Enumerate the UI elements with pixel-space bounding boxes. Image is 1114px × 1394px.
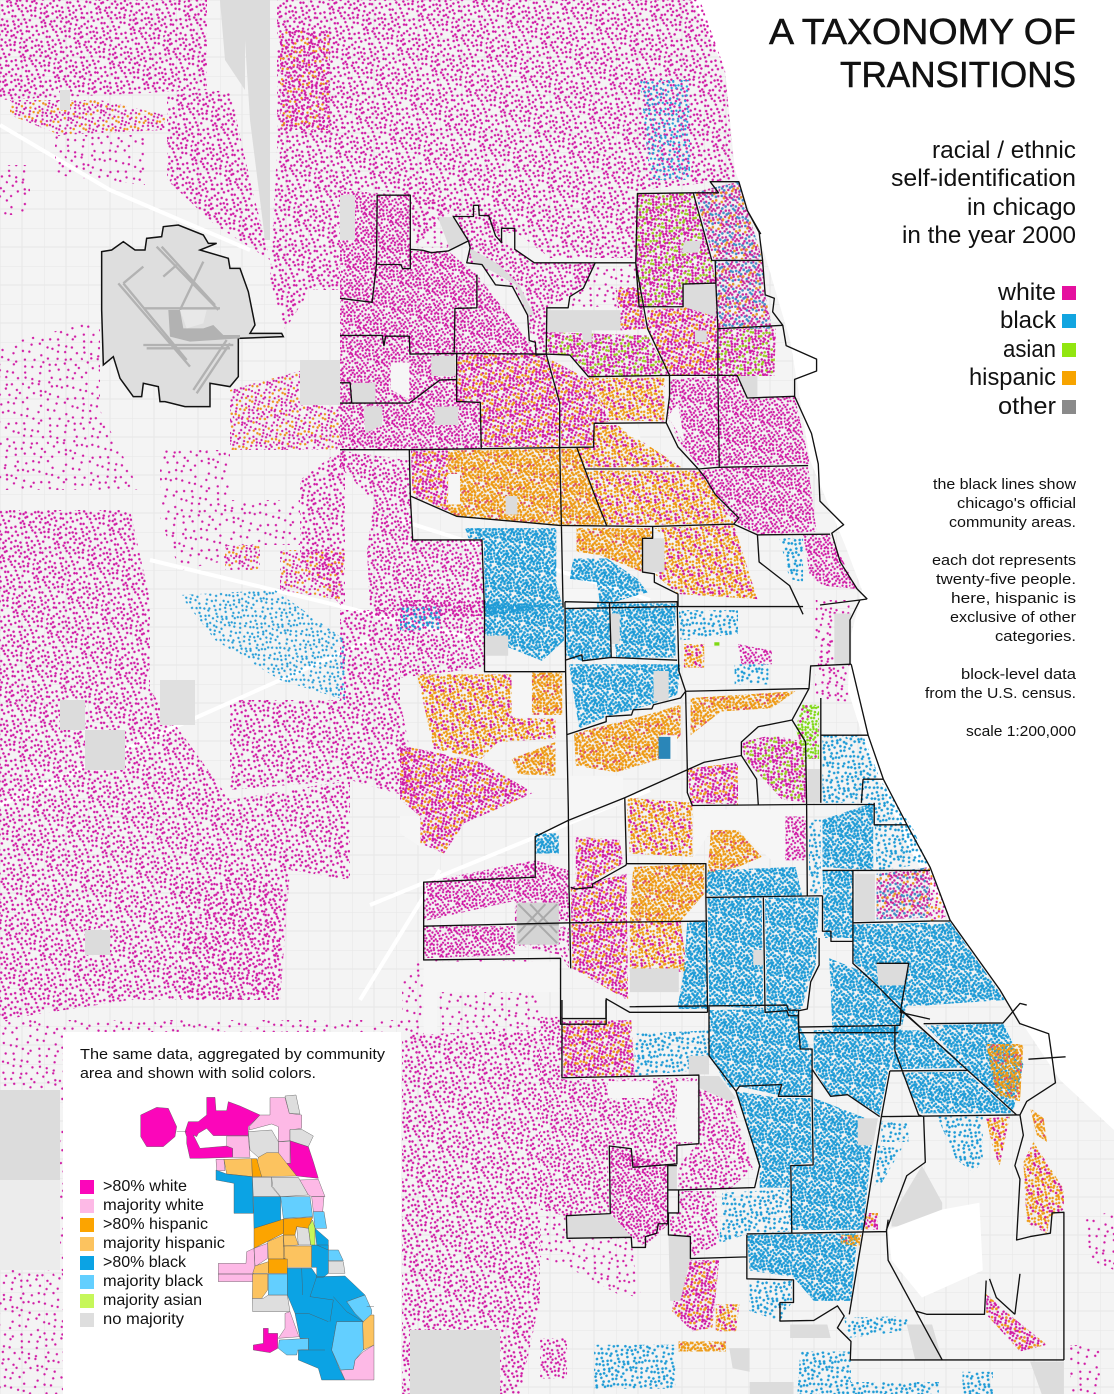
explanatory notes: categories. bbox=[995, 628, 1076, 645]
explanatory notes: from the U.S. census. bbox=[925, 685, 1076, 702]
inset legend: majority asian bbox=[103, 1292, 202, 1309]
black community area boundaries: far south bbox=[562, 1000, 1066, 1360]
inset legend: majority white bbox=[103, 1197, 204, 1214]
icon: o'hare airport bbox=[102, 225, 283, 407]
explanatory notes: block-level data bbox=[961, 666, 1077, 683]
dot colour legend: other bbox=[998, 393, 1056, 420]
dot colour legend: white bbox=[997, 279, 1056, 306]
inset legend: >80% white bbox=[103, 1178, 187, 1195]
dots: west and south side community areas bbox=[400, 600, 930, 1033]
inset legend: majority hispanic bbox=[103, 1235, 225, 1252]
inset legend: >80% hispanic bbox=[103, 1216, 208, 1233]
inset caption bbox=[80, 1046, 386, 1082]
title: TRANSITIONS bbox=[840, 54, 1076, 95]
dot colour legend bbox=[969, 279, 1076, 420]
subtitle: in the year 2000 bbox=[902, 222, 1076, 249]
subtitle: self-identification bbox=[891, 165, 1076, 192]
black community area boundaries: west and south bbox=[424, 600, 930, 1036]
parks: far south bbox=[566, 1056, 1064, 1394]
dot colour legend: hispanic bbox=[969, 364, 1056, 391]
parks and open land bbox=[0, 0, 500, 1394]
black community area boundaries: north bbox=[340, 182, 867, 616]
subtitle: racial / ethnic bbox=[932, 137, 1076, 164]
subtitle: in chicago bbox=[967, 194, 1076, 221]
explanatory notes: the black lines show bbox=[933, 476, 1076, 493]
dot colour legend: asian bbox=[1003, 336, 1056, 363]
title: A TAXONOMY OF bbox=[769, 11, 1076, 52]
dot colour legend: black bbox=[1000, 307, 1057, 334]
explanatory notes bbox=[925, 476, 1077, 740]
inset choropleth map bbox=[141, 1095, 374, 1380]
explanatory notes: exclusive of other bbox=[950, 609, 1076, 626]
explanatory notes: chicago's official bbox=[957, 495, 1076, 512]
inset caption: The same data, aggregated by community bbox=[80, 1046, 386, 1063]
explanatory notes: community areas. bbox=[949, 514, 1076, 531]
dots: far south community areas bbox=[540, 1008, 1064, 1394]
black boundaries: connecting segments bbox=[820, 599, 1020, 1024]
inset legend: majority black bbox=[103, 1273, 204, 1290]
inset legend bbox=[80, 1178, 225, 1328]
subtitle bbox=[891, 137, 1076, 249]
parks: north side bbox=[352, 217, 757, 608]
inset caption: area and shown with solid colors. bbox=[80, 1065, 316, 1082]
icon: midway airport bbox=[517, 903, 559, 945]
panel: aggregated inset bbox=[63, 1032, 401, 1394]
title bbox=[769, 11, 1076, 95]
explanatory notes: each dot represents bbox=[932, 552, 1076, 569]
inset legend: no majority bbox=[103, 1311, 184, 1328]
dots: north side community areas bbox=[340, 182, 857, 616]
explanatory notes: scale 1:200,000 bbox=[966, 723, 1076, 740]
inset legend: >80% black bbox=[103, 1254, 187, 1271]
explanatory notes: twenty-five people. bbox=[936, 571, 1076, 588]
explanatory notes: here, hispanic is bbox=[951, 590, 1076, 607]
parks: west and south side bbox=[400, 614, 909, 1034]
